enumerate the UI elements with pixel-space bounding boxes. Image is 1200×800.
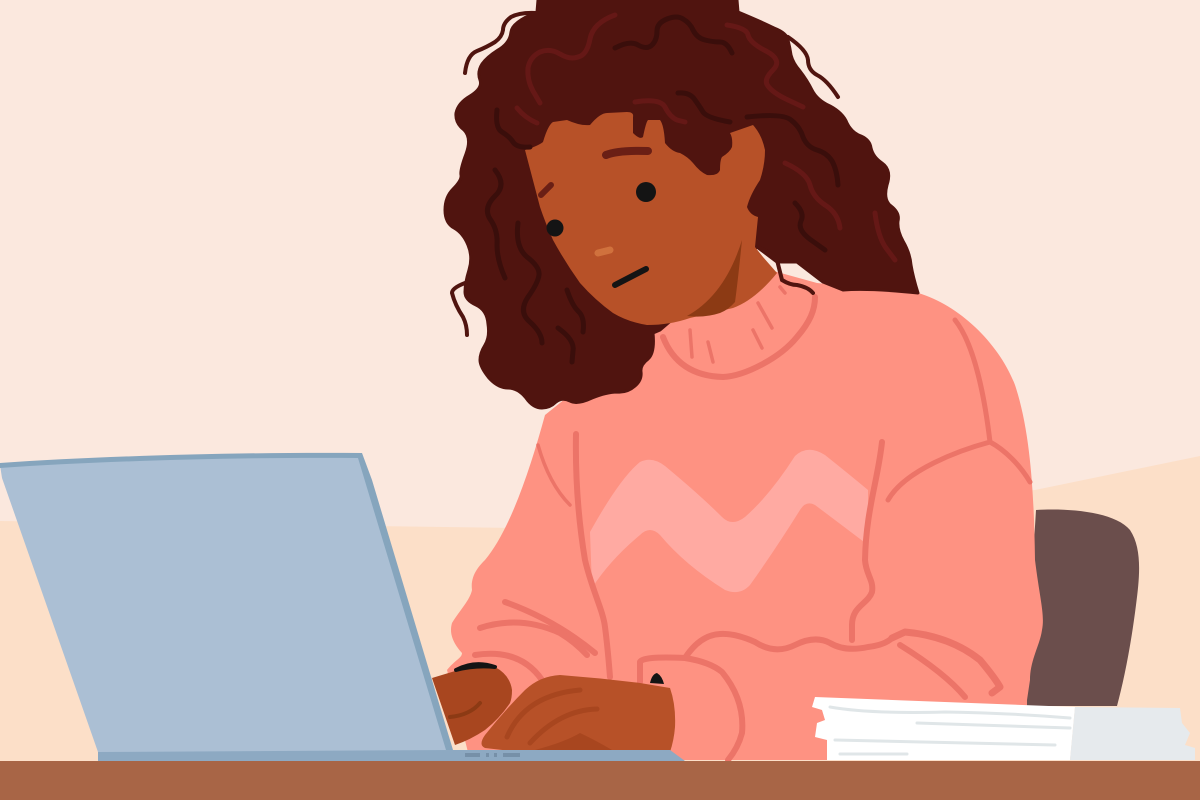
sweater chest zigzag bbox=[590, 450, 868, 592]
forearm fold bbox=[685, 634, 892, 658]
red hair curls bbox=[517, 15, 895, 260]
chair bbox=[1024, 510, 1139, 706]
left sleeve seam bbox=[576, 434, 610, 677]
left cuff creases bbox=[505, 602, 595, 653]
paper stack side bbox=[1070, 707, 1195, 760]
collar bbox=[663, 297, 815, 377]
dark hair curls bbox=[487, 17, 838, 362]
stack of papers bbox=[812, 697, 1195, 760]
left fingernail bbox=[456, 664, 495, 670]
hair bbox=[445, 0, 918, 408]
right hand finger lines bbox=[507, 690, 597, 743]
left hand finger line bbox=[450, 703, 480, 717]
right sleeve seam bbox=[852, 442, 882, 640]
nose bbox=[598, 250, 610, 253]
background lower wall band bbox=[0, 456, 1200, 770]
neck shadow bbox=[687, 240, 742, 317]
right cuff bbox=[640, 658, 742, 760]
laptop lid edge bbox=[0, 453, 453, 750]
desk bbox=[0, 761, 1200, 800]
laptop base bbox=[98, 750, 685, 761]
right eyebrow bbox=[606, 151, 648, 155]
right fingernail bbox=[650, 673, 664, 684]
paper stack white pages bbox=[812, 697, 1075, 760]
left hand bbox=[432, 664, 512, 745]
right hand bbox=[482, 675, 675, 752]
stray hair locks bbox=[452, 13, 838, 335]
right hand knuckle shadow bbox=[535, 733, 612, 750]
laptop keys bbox=[465, 753, 520, 757]
left eyebrow bbox=[541, 185, 551, 195]
curl over neck bbox=[758, 247, 813, 293]
right shoulder seam bbox=[888, 320, 1030, 500]
left shoulder crease bbox=[538, 445, 570, 505]
left eye bbox=[546, 220, 564, 236]
face and neck bbox=[525, 112, 777, 325]
right eye bbox=[636, 182, 656, 202]
sweater knit strokes bbox=[475, 287, 1030, 760]
sweater body bbox=[447, 270, 1043, 760]
mouth bbox=[615, 269, 646, 285]
paper lines bbox=[830, 707, 1070, 754]
collar ribs bbox=[690, 287, 785, 362]
laptop screen back bbox=[0, 455, 452, 752]
